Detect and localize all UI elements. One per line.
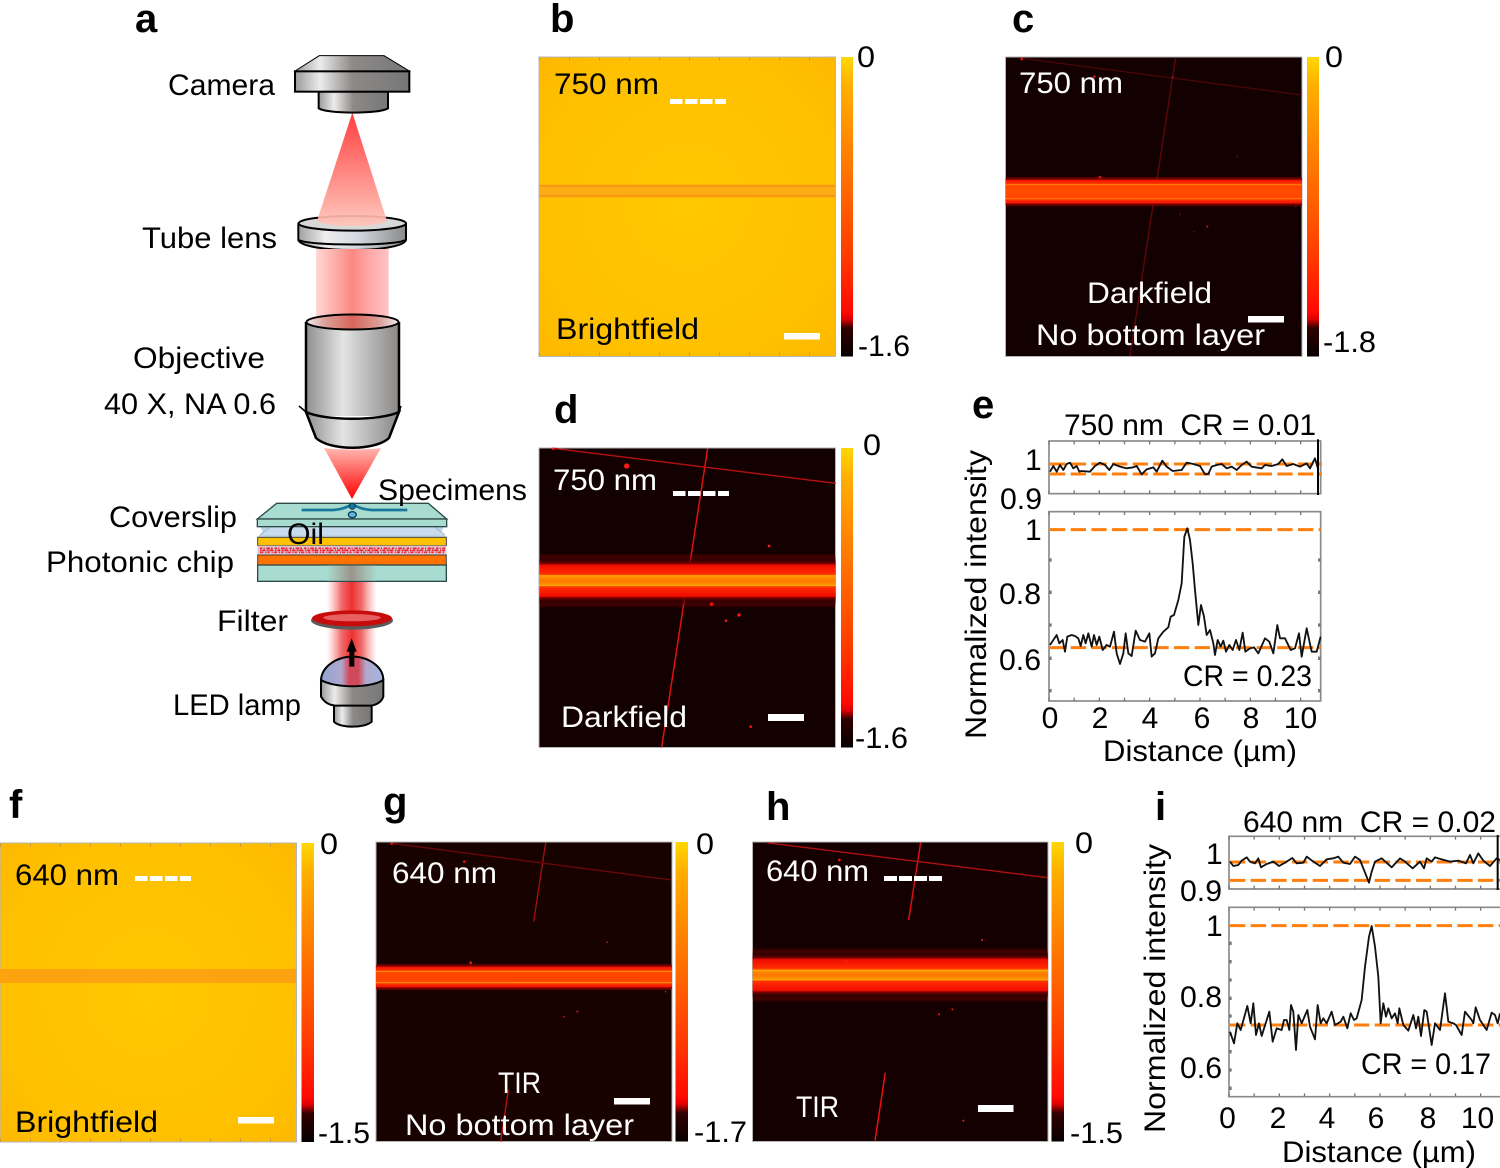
- x tick labels: 0: [1042, 702, 1058, 735]
- colorbar: [841, 41, 910, 363]
- x tick labels: 4: [1142, 702, 1158, 735]
- colorbar: -1.5: [1070, 1117, 1123, 1150]
- dashed profile marker: [135, 876, 191, 881]
- icon: specimen on coverslip: [302, 503, 407, 518]
- y tick labels: 0.9: [1180, 875, 1222, 908]
- icon: camera: [295, 56, 409, 113]
- title: 640 nm CR = 0.02: [1243, 806, 1496, 839]
- mode label: Darkfield: [561, 701, 687, 734]
- arrow: light direction: [347, 638, 357, 667]
- panel h: TIR 640 nm: [752, 827, 1123, 1150]
- x tick labels: 0: [1219, 1102, 1236, 1135]
- panel label h: h: [766, 785, 790, 829]
- panel label d: d: [554, 388, 578, 432]
- label: Camera: Camera: [168, 69, 275, 102]
- x tick labels: 6: [1368, 1102, 1384, 1135]
- chart: top and bottom profile axes: [1048, 439, 1322, 701]
- image: TIR background: [376, 842, 672, 1142]
- scale bar: [1248, 316, 1284, 322]
- y tick labels: [999, 444, 1042, 677]
- panel b: brightfield 750 nm: [539, 41, 910, 363]
- panel d: darkfield 750 nm: [539, 429, 908, 755]
- x tick labels: [1042, 702, 1317, 735]
- contrast ratio annotation: CR = 0.17: [1361, 1048, 1491, 1081]
- contrast ratio annotation: CR = 0.23: [1183, 660, 1312, 693]
- label: Coverslip: Coverslip: [109, 501, 237, 534]
- colorbar: 0: [320, 828, 338, 861]
- colorbar: 0: [863, 429, 881, 462]
- colorbar: -1.6: [855, 722, 908, 755]
- colorbar: [676, 828, 747, 1149]
- colorbar: 0: [696, 828, 714, 861]
- y tick labels: 0.8: [999, 578, 1041, 611]
- mode label: TIR: [498, 1067, 541, 1100]
- y tick labels: 1: [1025, 444, 1042, 477]
- panel label i: i: [1155, 785, 1166, 829]
- icon: photonic chip stack: [257, 503, 447, 581]
- scratches and particles: [376, 842, 672, 1142]
- dashed profile marker: [673, 491, 729, 496]
- icon: objective lens: [299, 314, 401, 448]
- wavelength label: 640 nm: [766, 855, 869, 888]
- scale bar: [614, 1098, 650, 1104]
- y tick labels: 0.6: [999, 644, 1041, 677]
- icon: red filter: [311, 610, 393, 630]
- beam: illumination below chip: [327, 581, 377, 675]
- beam: camera cone: [317, 113, 387, 226]
- wavelength label: 640 nm: [15, 859, 119, 892]
- x axis title: Distance (µm): [1103, 735, 1297, 768]
- scratches and particles: [539, 447, 836, 747]
- scale bar: [784, 333, 820, 340]
- colorbar: 0: [857, 41, 875, 74]
- colorbar: -1.7: [694, 1116, 747, 1149]
- waveguide: [539, 553, 836, 608]
- panel i: intensity profiles 640 nm: [1139, 806, 1500, 1168]
- label: 40 X, NA 0.6: 40 X, NA 0.6: [104, 388, 276, 421]
- y tick labels: 1: [1025, 514, 1042, 547]
- label: Photonic chip: Photonic chip: [46, 546, 234, 579]
- wavelength label: 750 nm: [554, 68, 659, 101]
- colorbar: -1.6: [858, 330, 910, 363]
- scale bar: [768, 714, 804, 721]
- condition label: No bottom layer: [405, 1109, 634, 1142]
- panel label f: f: [9, 783, 23, 827]
- colorbar: -1.5: [318, 1117, 370, 1150]
- y axis title: Normalized intensity: [1139, 844, 1172, 1133]
- y tick labels: [1180, 838, 1223, 1085]
- image: TIR background: [752, 842, 1048, 1142]
- colorbar: 0: [1325, 41, 1343, 74]
- y tick labels: 0.8: [1180, 981, 1222, 1014]
- waveguide: [376, 964, 672, 990]
- chart: top and bottom profile axes: [1228, 835, 1500, 1097]
- colorbar: 0: [1075, 827, 1093, 860]
- x tick labels: 10: [1284, 702, 1317, 735]
- wavelength label: 750 nm: [553, 464, 657, 497]
- label: Specimens: Specimens: [378, 474, 527, 507]
- colorbar: [1052, 827, 1123, 1150]
- x tick labels: 8: [1420, 1102, 1436, 1135]
- upper optical train: camera, tube lens and beams: [295, 56, 409, 323]
- panel a: microscope setup schematic: [46, 56, 527, 727]
- scale bar: [238, 1117, 274, 1124]
- x tick labels: 6: [1194, 702, 1210, 735]
- colorbar: [1307, 41, 1376, 359]
- image: brightfield: [539, 57, 836, 356]
- bottom chart axes: [1228, 907, 1500, 1097]
- bottom chart axes: [1048, 512, 1321, 701]
- waveguide band: [540, 184, 835, 198]
- dashed profile marker: [884, 876, 943, 881]
- image: brightfield: [0, 843, 296, 1142]
- mode label: Brightfield: [15, 1106, 158, 1139]
- label: Tube lens: Tube lens: [142, 222, 277, 255]
- y tick labels: 1: [1206, 910, 1223, 943]
- panel label e: e: [972, 383, 994, 427]
- scale bar: [978, 1105, 1014, 1112]
- colorbar: -1.8: [1323, 326, 1376, 359]
- label: Oil: Oil: [287, 518, 324, 551]
- panel g: TIR no bottom layer 640 nm: [376, 828, 747, 1149]
- x tick labels: 4: [1319, 1102, 1335, 1135]
- panel e: intensity profiles 750 nm: [960, 409, 1322, 768]
- image: darkfield background: [539, 448, 836, 748]
- mode label: Darkfield: [1087, 277, 1212, 310]
- scratches and particles: [1006, 57, 1302, 356]
- y axis title: Normalized intensity: [960, 450, 993, 739]
- waveguide band: [0, 969, 296, 983]
- beam: collimated section: [316, 249, 389, 323]
- dashed profile marker: [670, 99, 726, 104]
- icon: tube lens: [298, 216, 406, 250]
- title: 750 nm CR = 0.01: [1064, 409, 1316, 442]
- panel label g: g: [383, 780, 407, 824]
- y tick labels: 0.9: [1000, 483, 1042, 516]
- waveguide: [753, 948, 1048, 1002]
- condition label: No bottom layer: [1036, 319, 1265, 352]
- top chart axes: [1228, 835, 1500, 890]
- label: LED lamp: LED lamp: [173, 689, 301, 722]
- y tick labels: 1: [1206, 838, 1223, 871]
- y tick labels: 0.6: [1180, 1052, 1222, 1085]
- wavelength label: 640 nm: [392, 857, 497, 890]
- x tick labels: [1219, 1102, 1494, 1135]
- beam: focused cone: [324, 448, 381, 499]
- panel c: darkfield no bottom layer 750 nm: [1006, 41, 1376, 359]
- label: Filter: Filter: [217, 605, 288, 638]
- scratches and particles: [753, 843, 1048, 1141]
- x tick labels: 8: [1243, 702, 1259, 735]
- lower optical train: chip stack, filter, lamp: [257, 503, 447, 727]
- x tick labels: 2: [1092, 702, 1108, 735]
- wavelength label: 750 nm: [1019, 67, 1123, 100]
- colorbar: [302, 828, 370, 1150]
- image: darkfield background: [1006, 57, 1302, 356]
- mode label: TIR: [796, 1091, 839, 1124]
- top chart axes: [1048, 439, 1322, 495]
- mode label: Brightfield: [556, 313, 699, 346]
- x tick labels: 10: [1461, 1102, 1494, 1135]
- panel f: brightfield 640 nm: [0, 828, 370, 1150]
- x tick labels: 2: [1270, 1102, 1286, 1135]
- icon: LED lamp: [321, 657, 383, 727]
- label: Objective: Objective: [133, 342, 265, 375]
- waveguide: [1006, 177, 1302, 207]
- colorbar: [841, 429, 908, 755]
